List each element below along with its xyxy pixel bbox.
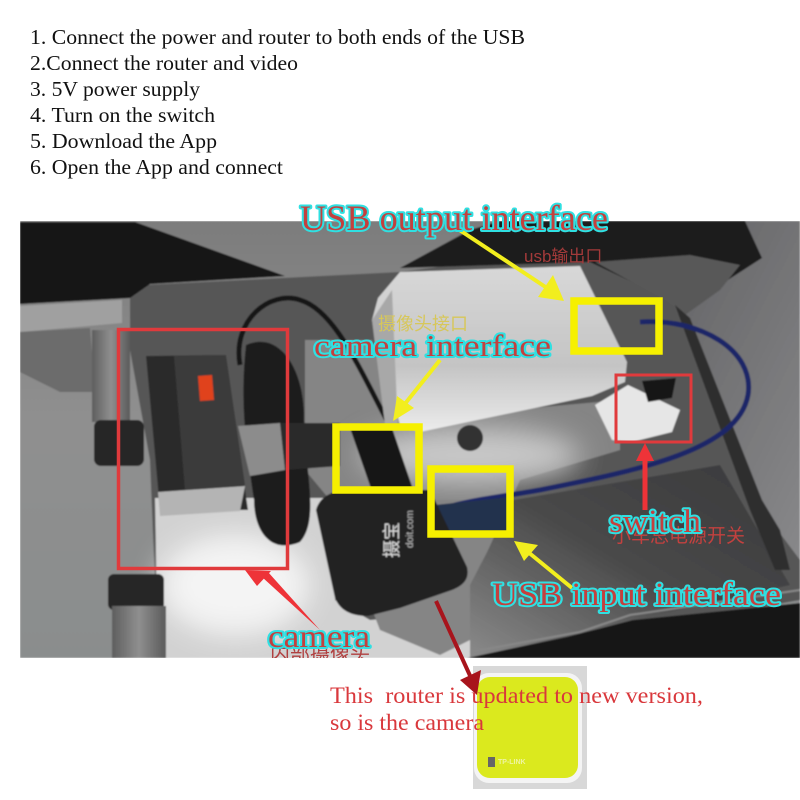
label: usb input interface: USB input interface: [492, 577, 781, 613]
dark red arrow to new router: [436, 601, 481, 695]
left plate: [20, 300, 122, 332]
steps text block: 2.Connect the router and video: [30, 51, 298, 75]
label: camera: camera: [268, 618, 370, 654]
chassis plate: [130, 248, 800, 658]
cable coil: [243, 342, 310, 546]
right background: [686, 221, 800, 542]
steps text block: 5. Download the App: [30, 129, 217, 153]
steps text block: 3. 5V power supply: [30, 77, 201, 101]
black switch: [642, 378, 676, 402]
dark strap: [280, 423, 340, 470]
speckled plate middle: [305, 340, 620, 655]
bottom motor: [112, 606, 166, 658]
new router photo: TP-LINK: [498, 759, 526, 766]
steps text block: 4. Turn on the switch: [30, 103, 216, 127]
router logo: 摄宝: [382, 522, 402, 558]
bright lit plate area: [155, 498, 470, 658]
note: router updated: This router is updated to new version,: [330, 683, 703, 709]
camera sticker: [198, 375, 214, 401]
arrow: camera interface: [393, 360, 440, 421]
top-right track: [400, 221, 762, 280]
arrow: usb output: [458, 229, 564, 301]
bottom-right track: [467, 603, 800, 658]
top motor cap: [94, 420, 144, 466]
bottom-right rail highlight: [509, 588, 800, 645]
camera lower mount: [158, 486, 245, 516]
steps text block: 6. Open the App and connect: [30, 155, 283, 179]
wall background: [20, 221, 800, 658]
steps text block: 1. Connect the power and router to both ends of the USB: [30, 25, 525, 49]
yellow frame: usb input: [431, 469, 510, 534]
ghost labels: [270, 247, 745, 666]
black cable: [239, 298, 392, 430]
usb connector: [436, 497, 506, 530]
camera bracket shadow: [146, 355, 248, 510]
blue usb cable: [445, 322, 749, 508]
arrow: switch: [636, 443, 654, 510]
note: router updated: so is the camera: [330, 710, 485, 736]
ghost labels: usb输出口: [524, 247, 602, 266]
box side: [372, 290, 398, 430]
top-left track: [20, 222, 285, 304]
label: switch: switch: [609, 504, 702, 540]
ghost labels: 小车总电源开关: [612, 525, 745, 547]
steps text block: [30, 25, 525, 179]
metal strap: [238, 423, 285, 476]
ghost labels: 内部摄像头: [270, 643, 370, 666]
yellow frame: usb output: [574, 301, 659, 351]
right bracket: [595, 255, 740, 315]
new router photo: [473, 666, 587, 789]
arrow: usb input: [514, 541, 572, 588]
white router box: [372, 266, 627, 432]
left lower bracket: [20, 328, 95, 392]
switch housing: [595, 385, 680, 442]
camera body: [174, 355, 245, 490]
top motor: [92, 330, 130, 422]
note: router updated: [330, 683, 703, 736]
right rail: [675, 305, 790, 570]
red frame: switch: [616, 375, 691, 442]
router site text: doit.com: [405, 510, 416, 548]
yellow frame: camera interface: [336, 427, 419, 490]
red frame: camera: [118, 330, 288, 568]
camera plug: [350, 430, 413, 486]
arrow: camera: [245, 570, 320, 630]
bottom motor cap: [108, 574, 164, 610]
label: usb output interface: USB output interface: [300, 198, 608, 238]
ghost labels: 摄像头接口: [378, 314, 468, 334]
lower right plate: [470, 465, 790, 658]
photo of tank chassis with router and camera: [20, 221, 800, 666]
small pocket router: [316, 490, 468, 616]
hole: [457, 425, 483, 451]
label: camera interface: camera interface: [314, 328, 551, 363]
